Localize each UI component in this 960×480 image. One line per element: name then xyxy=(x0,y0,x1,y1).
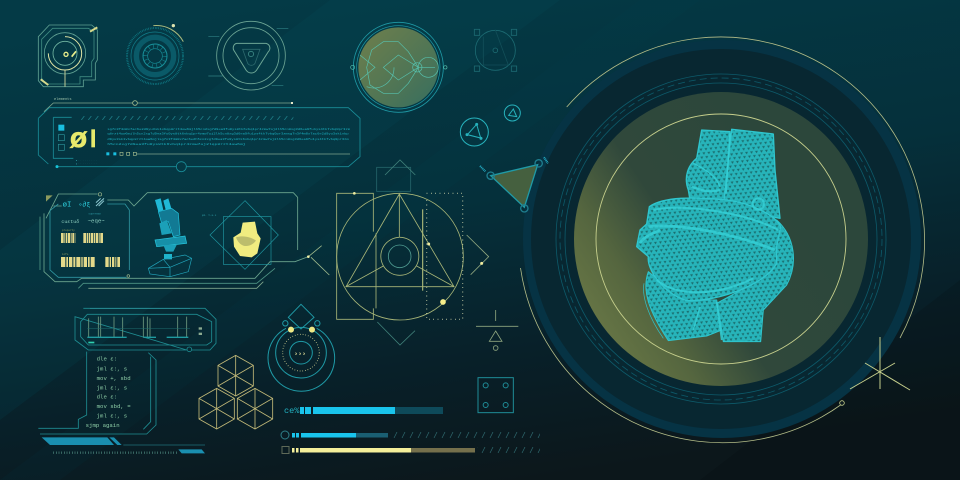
hexagon cubes xyxy=(199,355,273,429)
progress squares and rule xyxy=(106,152,350,155)
panel: barcode card and microscope: superman xyxy=(88,211,101,215)
data text lines: d9yu3sk1vbqp8rzt4ow6mjlsg7n3f4m0x7ac6e2h5cn2xg7d9ea3fu0ys8tk6vbq1pr4zmw7oj2lh5cn8xg3d6ea9fu1ys4tk7vbq0pr3zm xyxy=(107,138,350,141)
data text lines xyxy=(107,128,351,146)
data text lines: q8rzt4ow6mjlh5cn2xg7d9ea3fu0ys8tk6vbq1pr4zmw7oj2lh5cn8xg3d6ea9fu1ys4tk7vbq0pr3zmsg7n3f4m0x7ac6e2d9yu3sk1vbp xyxy=(107,133,350,136)
main lens disc with knee mesh xyxy=(520,37,925,443)
concentric dashed rings xyxy=(556,74,886,404)
outer thin arcs xyxy=(520,37,925,443)
bar: percent: ce% xyxy=(284,406,300,416)
dark inner disc xyxy=(531,49,911,429)
panel frame xyxy=(38,108,360,167)
header line with label xyxy=(44,97,293,112)
triangle marker glyph xyxy=(476,310,518,350)
olive lens with schematic xyxy=(351,22,447,112)
panel: barcode card and microscope xyxy=(40,193,329,288)
microscope xyxy=(148,198,192,277)
waveform spikes xyxy=(87,317,190,337)
card text xyxy=(63,201,90,210)
card text: øI xyxy=(63,202,71,210)
circular gauge: ››› xyxy=(294,349,306,357)
code text: dle ε: xyxy=(97,355,117,362)
knee wireframe mesh xyxy=(637,129,793,342)
panel: barcode card and microscope: info xyxy=(62,252,69,256)
panel: data readout xyxy=(38,108,360,172)
frame lines xyxy=(40,193,329,288)
header label: elements xyxy=(54,97,72,102)
icon: gear ring xyxy=(127,24,183,84)
icon: square radar xyxy=(38,25,97,87)
olive triangle marker xyxy=(480,157,548,212)
code text: sjmp again xyxy=(86,422,120,429)
rectangle glyph with four circles xyxy=(478,378,513,413)
code text: jml ε:, s xyxy=(97,384,127,391)
panel: barcode card and microscope: ᵽk· t·a·s xyxy=(202,213,217,217)
panel: barcode card and microscope: property xyxy=(62,228,75,232)
code text: dle ε: xyxy=(97,393,117,400)
code text xyxy=(86,355,131,429)
big glyph: ø xyxy=(70,122,87,153)
check boxes xyxy=(58,125,64,131)
code text: mov +, sbd xyxy=(97,375,131,382)
bar: cyan xyxy=(281,431,540,439)
bar: percent xyxy=(284,406,443,416)
panel: barcode card and microscope: cuɛtuδ xyxy=(61,219,79,225)
code text: jml ε:, s xyxy=(97,413,127,420)
panel: oscilloscope and code xyxy=(38,308,216,453)
card text: ∘∂ξ xyxy=(78,201,90,209)
small node on arc xyxy=(840,401,844,405)
icon: trefoil circle xyxy=(208,21,288,90)
data text lines: h5cn2xg7d9ea3fu0ys8tk6vbq1pr4zmw7oj2lqp8rzt4ow6mj xyxy=(107,143,246,146)
thin outline left of lower lobe xyxy=(644,283,663,338)
small legend xyxy=(76,159,97,165)
progress bars xyxy=(281,406,540,454)
crosshair target circle xyxy=(474,29,517,71)
bar: yellow xyxy=(282,446,540,454)
crosshair star xyxy=(850,337,910,390)
circular gauge xyxy=(268,304,335,391)
outer blue ring xyxy=(523,40,921,438)
small legend: ■ · · · · · · · · · xyxy=(76,162,97,165)
rotated squares with bone xyxy=(210,201,278,269)
code text: mov sbd, = xyxy=(97,403,131,410)
code text: jml ε:, s xyxy=(97,365,127,372)
barcodes xyxy=(61,238,120,262)
panel: barcode card and microscope: ~eqe~ xyxy=(88,218,105,225)
hatched strip xyxy=(80,116,293,120)
small legend: ■ · · · · · · · · · xyxy=(76,159,97,162)
bottom bars xyxy=(42,437,114,445)
data text lines: sg7n3f4m0x7ac6e2d9yu3sk1vbqp8rzt4ow6mjlh5cn2xg7d9ea3fu0ys8tk6vbq1pr4zmw7oj2lh5cn8xg3d6ea9fu1ys4tk7vbq0pr3zm xyxy=(107,128,351,131)
sacred geometry diagram xyxy=(337,160,489,345)
olive disc xyxy=(574,92,868,386)
inner thin circle xyxy=(596,114,846,364)
icon: small triangle circles xyxy=(460,105,520,146)
